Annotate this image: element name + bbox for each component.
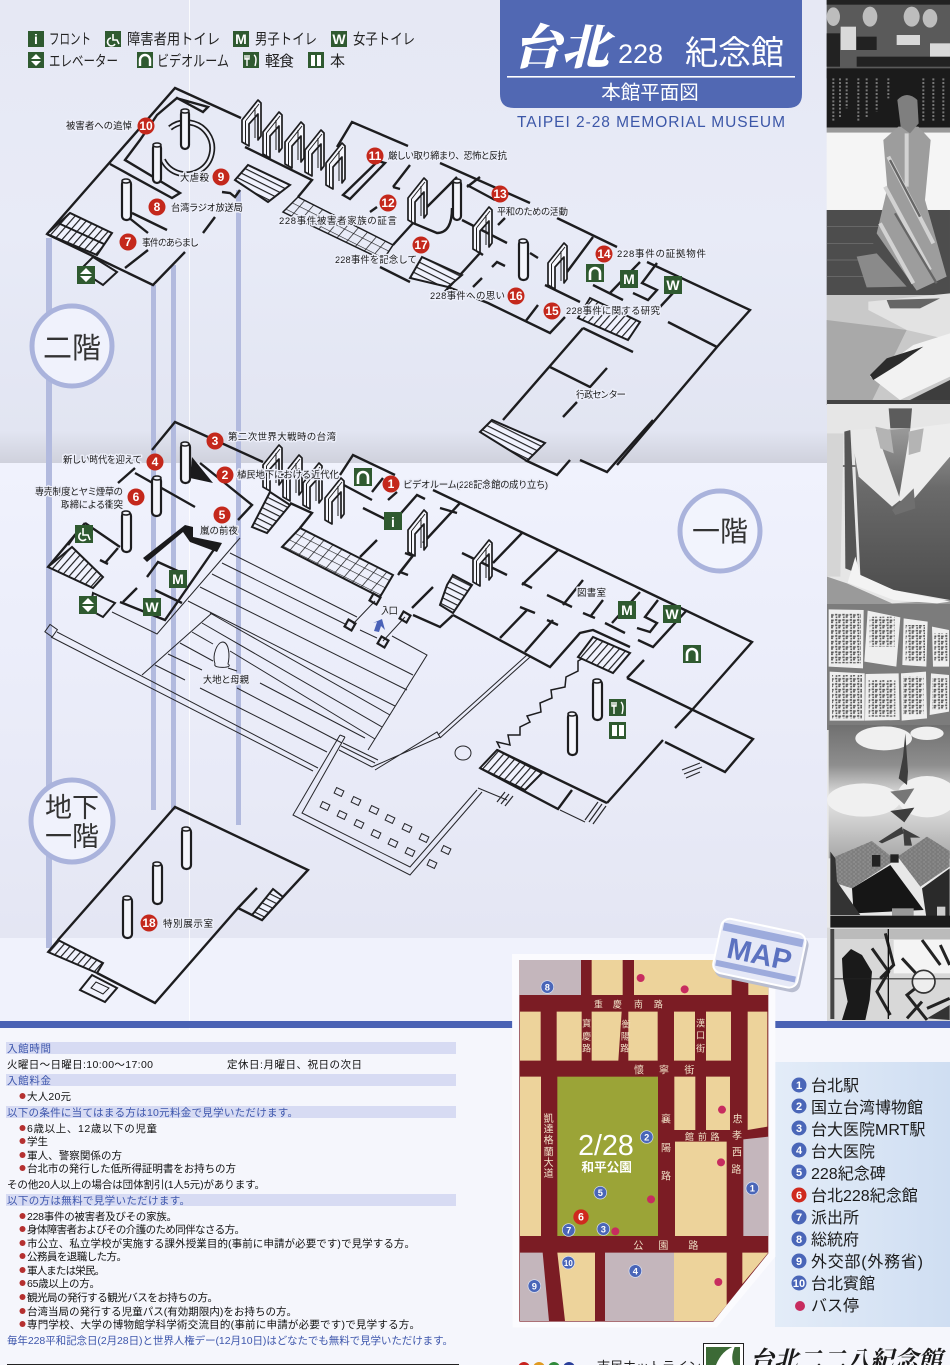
legend item: women's toilet <box>331 31 415 48</box>
2F facility icons: M <box>623 271 635 287</box>
free days note: 毎年228平和記念日(2月28日)と世界人権デー(12月10日)はどなたでも無料で見学いただけます。 <box>7 1334 453 1347</box>
free admission list: 専門学校、大学の博物館学科学術交流目的(事前に申請が必要です)で見学する方。 <box>27 1318 420 1331</box>
2F room labels: 台湾ラジオ放送局 <box>171 202 243 214</box>
photo: shirt <box>827 400 950 608</box>
key item 9: 9 <box>796 1256 802 1268</box>
street names: 大 <box>544 1156 554 1169</box>
legend item: men's toilet <box>233 31 317 48</box>
B1 elevator shaft <box>80 975 117 1002</box>
floor badge: B1 <box>31 780 113 862</box>
1F elevator shaft <box>90 593 115 617</box>
street names: 園 <box>658 1240 668 1252</box>
key item 7: 7 <box>796 1212 802 1224</box>
2F numbered markers: 14 <box>597 247 611 261</box>
street names: 路 <box>620 1042 629 1053</box>
2F facility icons <box>77 264 682 294</box>
MAP tag: MAP <box>724 932 795 978</box>
key item 4: 台大医院 <box>811 1143 875 1161</box>
key item bus stop: バス停 <box>811 1297 859 1315</box>
street names: 公 <box>633 1240 643 1252</box>
street names: 漢 <box>696 1018 705 1029</box>
street names: 衡 <box>622 1018 631 1029</box>
MAP tag <box>711 917 811 994</box>
street names: 路 <box>582 1042 591 1053</box>
map blocks <box>520 960 768 1321</box>
1F room labels: 入口 <box>381 606 398 617</box>
map key <box>792 1077 925 1315</box>
title: museum name <box>513 9 784 78</box>
bottom hairline <box>7 1364 459 1365</box>
B1 columns <box>123 827 191 938</box>
legend item: men's toilet: 男子トイレ <box>255 31 317 48</box>
plan: first floor <box>35 422 753 875</box>
floor badge: 1F: 一階 <box>692 516 748 547</box>
free admission list: 公務員を退職した方。 <box>27 1250 127 1263</box>
map numbered markers: 5 <box>598 1188 603 1198</box>
map numbered markers: 1 <box>750 1184 755 1194</box>
fee information: 大人20元 <box>27 1090 72 1103</box>
2F room labels: 228事件被害者家族の証言 <box>279 215 397 227</box>
photo strip <box>827 0 950 1023</box>
photo: plaque wall and statue <box>827 0 950 295</box>
key item 2: 2 <box>796 1101 802 1113</box>
2F testimony grid <box>283 197 393 260</box>
legend item: video room: ビデオルーム <box>157 52 229 70</box>
key item 7 <box>792 1209 859 1227</box>
1F south zigzag wall <box>497 657 585 748</box>
park <box>557 1077 658 1236</box>
key item 2: 国立台湾博物館 <box>811 1099 923 1117</box>
hotline dots <box>518 1362 575 1365</box>
street names: 陽 <box>621 1031 630 1041</box>
key item 8 <box>792 1231 859 1249</box>
photo: comic mural <box>827 928 950 1023</box>
1F dark wall wedges <box>143 457 222 562</box>
key panel background <box>775 1062 950 1327</box>
map roads <box>519 960 768 1322</box>
free admission list: 228事件の被害者及びその家族。 <box>27 1210 177 1223</box>
free admission list <box>7 1194 420 1331</box>
1F room labels: 専売制度とヤミ煙草の <box>35 486 123 498</box>
1F room labels: 新しい時代を迎えて <box>63 454 142 466</box>
key item 5: 5 <box>796 1167 802 1179</box>
floor badge: B1: 一階 <box>45 822 99 852</box>
floor badge: B1: 地下 <box>45 793 99 823</box>
free admission list: 観光局の発行する観光バスをお持ちの方。 <box>27 1291 218 1304</box>
map numbered markers: 6 <box>578 1212 584 1224</box>
legend item: front desk <box>28 31 91 48</box>
floor badge: 1F <box>680 491 760 571</box>
1F facility icons: M <box>172 571 184 587</box>
court paving squares <box>320 788 451 868</box>
marker 18 with label: 18 <box>142 916 156 930</box>
statue <box>214 642 229 667</box>
2F facility icons: W <box>666 277 680 293</box>
map numbered markers: 4 <box>633 1266 639 1276</box>
2F columns <box>122 109 528 280</box>
key item 6: 台北228紀念館 <box>811 1187 918 1205</box>
2F numbered markers: 13 <box>493 187 507 201</box>
legend item: accessible toilet: 障害者用トイレ <box>127 31 220 48</box>
1F facility icons: i <box>391 514 395 530</box>
key item 4: 4 <box>796 1145 803 1157</box>
location map: 2/28 <box>578 1130 634 1162</box>
1F facility icons: M <box>621 602 633 618</box>
2F numbered markers: 16 <box>509 289 523 303</box>
legend item: women's toilet: W <box>332 31 346 47</box>
reduced fee list: 軍人、警察関係の方 <box>27 1149 122 1162</box>
1F columns <box>122 442 602 755</box>
2F numbered markers: 12 <box>381 196 395 210</box>
opening hours <box>7 1042 362 1071</box>
1F room labels: 取締による衝突 <box>61 499 123 511</box>
legend item: elevator <box>28 52 118 70</box>
entrance arrow <box>373 619 385 632</box>
english title: TAIPEI 2-28 MEMORIAL MUSEUM <box>517 114 785 131</box>
street names: 寧 <box>659 1063 669 1076</box>
1F facility icons <box>75 468 701 739</box>
map numbered markers <box>528 981 759 1292</box>
marker 18 with label <box>140 914 213 932</box>
2F numbered markers: 9 <box>218 170 225 184</box>
floor connector bars <box>46 190 241 948</box>
key item 7: 派出所 <box>811 1209 859 1227</box>
bottom blue rule <box>0 1021 950 1028</box>
footer strip <box>518 1340 946 1365</box>
photo: memorial tower <box>827 725 950 928</box>
key item 3: 3 <box>796 1123 802 1135</box>
2F room labels: 行政センター <box>576 389 626 401</box>
2F numbered markers: 10 <box>139 119 153 133</box>
map numbered markers: 2 <box>644 1132 649 1142</box>
1F room labels: 大地と母親 <box>203 674 249 686</box>
2F room labels <box>66 120 706 401</box>
street names: 凱 <box>544 1113 554 1125</box>
title banner <box>500 0 802 108</box>
1F numbered markers: 6 <box>133 490 140 504</box>
location map: 和平公園 <box>581 1160 632 1174</box>
reduced fee list: 学生 <box>27 1135 48 1148</box>
map numbered markers: 3 <box>601 1224 606 1234</box>
street names: 孝 <box>732 1130 742 1142</box>
2F room labels: 平和のための活動 <box>497 206 568 218</box>
legend item: light meals <box>243 52 294 70</box>
1F room labels: 図書室 <box>577 587 606 599</box>
street names: 路 <box>711 1131 720 1142</box>
legend item: front desk: i <box>34 31 38 47</box>
map numbered markers: 9 <box>532 1281 537 1291</box>
title: museum name: 228 <box>618 39 663 69</box>
key item 1: 1 <box>796 1080 802 1092</box>
1F room labels: 第二次世界大戦時の台湾 <box>228 431 336 443</box>
free admission list: 65歳以上の方。 <box>27 1277 100 1290</box>
key item 10: 台北賓館 <box>811 1275 875 1293</box>
2F numbered markers: 15 <box>545 304 559 318</box>
street names: 懷 <box>634 1064 644 1076</box>
map numbered markers: 10 <box>564 1259 573 1268</box>
fee information: 入館料金 <box>7 1074 52 1087</box>
key item 1: 台北駅 <box>811 1077 859 1095</box>
1F stairs <box>48 492 630 790</box>
street names: 南 <box>634 998 643 1009</box>
floor badge: 2F <box>32 306 112 386</box>
marker 18 with label: 特別展示室 <box>163 918 213 930</box>
legend item: elevator: エレベーター <box>49 53 118 70</box>
legend item: video room <box>137 52 229 70</box>
street names: 達 <box>544 1124 554 1136</box>
1F entrance posts <box>345 594 410 647</box>
2F ring wall <box>163 122 212 174</box>
street names: 前 <box>698 1131 707 1142</box>
street names: 口 <box>696 1031 705 1041</box>
legend item: light meals: 軽食 <box>265 53 294 70</box>
map numbered markers: 7 <box>566 1225 571 1235</box>
map numbered markers: 8 <box>545 982 550 992</box>
heading bands <box>6 1042 456 1206</box>
2F outer and inner walls <box>47 88 750 475</box>
bus stops <box>611 974 726 1286</box>
street names: 格 <box>544 1134 554 1147</box>
1F numbered markers: 5 <box>219 508 226 522</box>
reduced fee list: 台北市の発行した低所得証明書をお持ちの方 <box>27 1162 236 1175</box>
key item 9: 外交部(外務省) <box>811 1253 923 1271</box>
2F room labels: 228事件への思い <box>430 290 505 302</box>
free admission list: 身体障害者およびその介護のため同伴なさる方。 <box>27 1223 245 1236</box>
street names: 道 <box>544 1167 554 1180</box>
1F room labels: 植民地下における近代化 <box>237 469 339 481</box>
street names: 陽 <box>661 1142 671 1154</box>
floor badge: 2F: 二階 <box>43 333 101 365</box>
key item 3: 台大医院MRT駅 <box>811 1121 925 1139</box>
1F room labels <box>35 431 606 686</box>
1F numbered markers: 4 <box>152 455 159 469</box>
2F room labels: 事件のあらまし <box>142 237 199 249</box>
reduced fee list: 6歳以上、12歳以下の児童 <box>27 1123 158 1135</box>
street names: 街 <box>684 1063 694 1076</box>
admission information <box>6 1042 456 1347</box>
legend item: women's toilet: 女子トイレ <box>353 31 415 48</box>
2F room labels: 被害者への追悼 <box>66 120 132 132</box>
2F numbered markers: 11 <box>369 149 382 163</box>
street names: 慶 <box>582 1030 591 1041</box>
subtitle: 本館平面図 <box>601 82 699 104</box>
location map <box>512 917 811 1327</box>
reduced fee list: 以下の条件に当てはまる方は10元料金で見学いただけます。 <box>7 1106 298 1119</box>
B1 stairs <box>48 889 283 973</box>
1F facility icons: W <box>145 599 159 615</box>
museum logo <box>704 1344 744 1365</box>
1F gate arches <box>263 445 492 586</box>
1F numbered markers: 2 <box>222 468 229 482</box>
1F hall grid <box>282 528 393 597</box>
2F room labels: 228事件の証拠物件 <box>617 248 706 260</box>
street names: 館 <box>685 1131 694 1142</box>
fee information <box>7 1074 72 1103</box>
2F numbered markers: 17 <box>414 238 428 252</box>
key item 10: 10 <box>793 1278 805 1290</box>
street names: 重 <box>594 998 603 1009</box>
street names: 街 <box>696 1042 705 1053</box>
2F room labels: 228事件を記念して <box>335 254 417 266</box>
legend item: front desk: フロント <box>49 31 91 48</box>
plan: second floor <box>47 88 750 475</box>
street names: 襄 <box>661 1112 671 1125</box>
street names: 路 <box>688 1239 698 1252</box>
legend item: books: 本 <box>330 53 345 70</box>
photo: handwritten notes <box>827 604 950 730</box>
1F numbered markers <box>128 432 400 524</box>
key item 8: 8 <box>796 1234 802 1246</box>
reduced fee list: その他20人以上の場合は団体割引(1人5元)があります。 <box>7 1178 265 1191</box>
street names: 西 <box>732 1148 742 1159</box>
title: museum name: 紀念館 <box>685 34 784 71</box>
map card <box>512 954 775 1327</box>
1F walls <box>48 422 753 809</box>
opening hours: 入館時間 <box>7 1042 51 1055</box>
key item 6: 6 <box>796 1190 802 1202</box>
key item 5: 228紀念碑 <box>811 1165 886 1183</box>
street names: 蘭 <box>544 1145 554 1158</box>
plan: basement floor <box>48 807 308 1003</box>
1F room labels: 嵐の前夜 <box>200 525 238 537</box>
2F numbered markers <box>120 118 612 320</box>
2F gate arches <box>242 100 567 289</box>
legend item: men's toilet: M <box>235 31 247 47</box>
opening hours: 火曜日〜日曜日:10:00〜17:00 <box>7 1059 153 1071</box>
2F numbered markers: 8 <box>154 200 161 214</box>
free admission list: 市公立、私立学校が実施する課外授業目的(事前に申請が必要です)で見学する方。 <box>27 1237 415 1250</box>
street names: 路 <box>731 1163 741 1176</box>
reduced fee list <box>7 1106 298 1191</box>
1F numbered markers: 1 <box>388 477 395 491</box>
street names: 慶 <box>613 998 622 1009</box>
2F elevator shaft <box>80 257 117 285</box>
street names: 路 <box>661 1170 671 1183</box>
2F room labels: 厳しい取り締まり、恐怖と反抗 <box>388 150 507 162</box>
2F room labels: 大虐殺 <box>180 172 209 184</box>
1F plaza <box>45 538 702 875</box>
2F room labels: 228事件に関する研究 <box>566 305 660 317</box>
free admission list: 以下の方は無料で見学いただけます。 <box>7 1194 190 1207</box>
free admission list: 台湾当局の発行する児童パス(有効期限内)をお持ちの方。 <box>27 1305 297 1318</box>
title: museum name: 台北 <box>513 9 616 78</box>
2F stairs <box>47 165 640 461</box>
1F room labels: ビデオルーム(228記念館の成り立ち) <box>403 479 548 491</box>
1F numbered markers: 3 <box>212 434 219 448</box>
street names: 寶 <box>582 1018 591 1029</box>
legend item: books <box>308 52 345 70</box>
1F facility icons: W <box>665 606 679 622</box>
2F numbered markers: 7 <box>125 235 132 249</box>
B1 walls <box>58 807 308 1003</box>
street names <box>544 998 743 1252</box>
opening hours: 定休日:月曜日、祝日の次日 <box>227 1058 362 1071</box>
free admission list: 軍人または栄民。 <box>27 1264 105 1277</box>
key item 8: 総統府 <box>811 1231 859 1249</box>
key item 1 <box>792 1077 859 1095</box>
street names: 忠 <box>733 1113 743 1125</box>
photo: map book <box>827 293 950 405</box>
legend <box>28 31 415 70</box>
street names: 路 <box>654 998 663 1009</box>
